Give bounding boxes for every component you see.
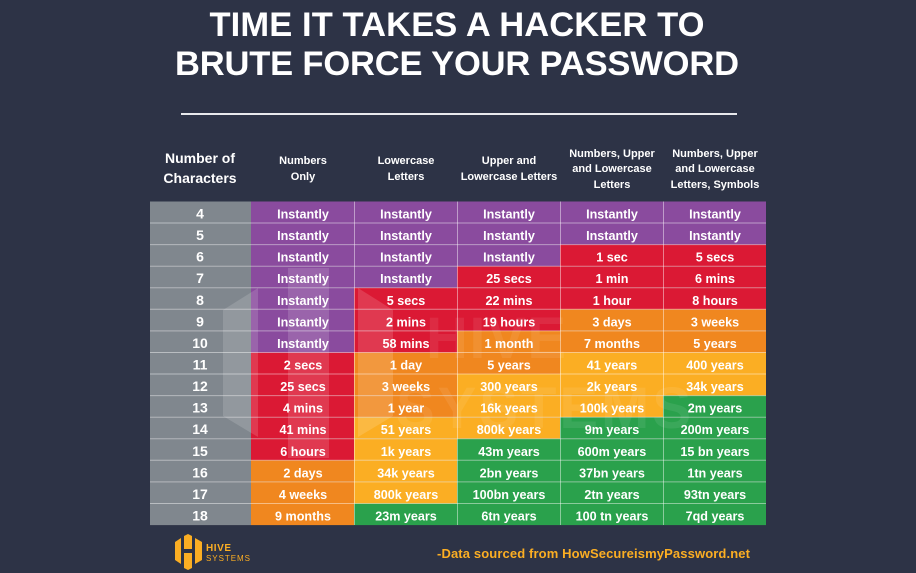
header: upper and lowercase letters: Lowercase Letters [461, 171, 557, 183]
row 12 characters: 25 secs [280, 380, 326, 394]
header: numbers only: Only [291, 171, 316, 183]
row 15 characters: 15 bn years [680, 445, 750, 459]
row 18 characters [150, 504, 766, 525]
row 18 characters: 7qd years [686, 510, 744, 524]
row 6 characters: Instantly [483, 251, 535, 265]
row 8 characters: 5 secs [387, 294, 425, 308]
row 12 characters [150, 374, 766, 396]
row 10 characters [150, 331, 766, 352]
row 6 characters: 6 [196, 249, 204, 265]
row 13 characters [150, 396, 766, 417]
row 8 characters [150, 288, 766, 309]
row 9 characters: Instantly [277, 315, 329, 329]
row 11 characters: 2 secs [284, 358, 322, 372]
header: upper and lowercase letters [461, 155, 557, 183]
row 10 characters: 10 [192, 335, 208, 351]
row 17 characters: 17 [192, 486, 208, 502]
row 8 characters: 1 hour [593, 294, 631, 308]
row 9 characters: 19 hours [483, 315, 535, 329]
row 13 characters: 13 [192, 400, 208, 416]
row 4 characters [150, 202, 766, 223]
header: lowercase letters: Letters [388, 171, 424, 183]
row 9 characters: 3 days [592, 315, 632, 329]
row 8 characters: 22 mins [486, 294, 532, 308]
title [175, 6, 739, 83]
row 9 characters: 9 [196, 313, 204, 329]
row 7 characters: 6 mins [695, 272, 735, 286]
row 13 characters: 16k years [480, 402, 538, 416]
row 10 characters: 58 mins [383, 337, 429, 351]
row 7 characters: 1 min [596, 272, 628, 286]
row 17 characters: 2tn years [584, 488, 640, 502]
row 4 characters: Instantly [689, 208, 741, 222]
row 9 characters: 2 mins [386, 315, 426, 329]
watermark: hive systems logo [223, 268, 691, 458]
row 7 characters: 7 [196, 270, 204, 286]
header: numbers only [279, 155, 327, 183]
row 17 characters: 100bn years [473, 488, 545, 502]
header: numbers, upper and lowercase letters: Numbers, Upper [569, 148, 656, 160]
row 15 characters: 43m years [478, 445, 540, 459]
logo wordmark: SYSTEMS [206, 554, 250, 563]
row 7 characters [150, 266, 766, 288]
row 4 characters: Instantly [380, 208, 432, 222]
row 15 characters: 15 [192, 443, 208, 459]
row 8 characters: 8 [196, 292, 204, 308]
row 7 characters: 25 secs [486, 272, 532, 286]
row 12 characters: 2k years [587, 380, 637, 394]
row 11 characters: 11 [193, 356, 208, 372]
row 18 characters: 6tn years [481, 510, 537, 524]
row 12 characters: 300 years [480, 380, 538, 394]
title: TIME IT TAKES A HACKER TO [210, 6, 704, 44]
row 4 characters: 4 [196, 206, 204, 222]
header: numbers, upper and lowercase letters: and Lowercase [572, 163, 652, 175]
row 8 characters: 8 hours [692, 294, 738, 308]
header: lowercase letters [378, 155, 434, 183]
row 18 characters: 9 months [275, 510, 331, 524]
row 5 characters: Instantly [277, 229, 329, 243]
row 16 characters: 34k years [377, 466, 435, 480]
row 17 characters: 93tn years [684, 488, 746, 502]
row 14 characters: 800k years [477, 423, 541, 437]
row 6 characters: 5 secs [696, 251, 734, 265]
row 9 characters: 3 weeks [691, 315, 739, 329]
row 10 characters: 7 months [584, 337, 640, 351]
row 7 characters: Instantly [277, 272, 329, 286]
row 14 characters: 9m years [585, 423, 639, 437]
row 5 characters: Instantly [689, 229, 741, 243]
row 14 characters: 51 years [381, 423, 431, 437]
row 15 characters: 600m years [578, 445, 646, 459]
row 10 characters: 1 month [485, 337, 533, 351]
row 14 characters: 200m years [681, 423, 749, 437]
row 15 characters: 6 hours [280, 445, 326, 459]
header: numbers, upper and lowercase letters [569, 148, 656, 191]
header: numbers, upper and lowercase letters: Letters [594, 179, 630, 191]
row 9 characters [150, 309, 766, 331]
row 12 characters: 12 [192, 378, 208, 394]
row 11 characters: 5 years [487, 358, 531, 372]
row 6 characters: 1 sec [596, 251, 628, 265]
watermark: hive systems logo: SYSTEMS [396, 376, 691, 441]
header: numbers, upper and lowercase letters, symbols [671, 148, 759, 191]
row 16 characters: 1tn years [687, 466, 743, 480]
row 6 characters [150, 245, 766, 266]
header: lowercase letters: Lowercase [378, 155, 434, 167]
row 16 characters: 2 days [283, 466, 323, 480]
row 10 characters: 5 years [693, 337, 737, 351]
row 17 characters: 800k years [374, 488, 438, 502]
row 4 characters: Instantly [586, 208, 638, 222]
table header [163, 148, 759, 191]
header: numbers, upper and lowercase letters, symbols: Numbers, Upper [672, 148, 759, 160]
row 11 characters: 1 day [390, 358, 422, 372]
row 16 characters: 2bn years [480, 466, 538, 480]
row 11 characters: 400 years [686, 358, 744, 372]
row 18 characters: 100 tn years [576, 510, 648, 524]
row 5 characters: 5 [196, 227, 204, 243]
row 17 characters [150, 482, 766, 504]
row 15 characters: 1k years [381, 445, 431, 459]
header: number of characters: Number of [165, 150, 235, 166]
row 11 characters: 41 years [587, 358, 637, 372]
row 13 characters: 4 mins [283, 402, 323, 416]
row 12 characters: 34k years [686, 380, 744, 394]
logo: hive systems [175, 534, 250, 570]
row 6 characters: Instantly [277, 251, 329, 265]
row 5 characters [150, 223, 766, 245]
row 15 characters [150, 439, 766, 460]
row 5 characters: Instantly [483, 229, 535, 243]
header: numbers only: Numbers [279, 155, 327, 167]
row 5 characters: Instantly [586, 229, 638, 243]
row 8 characters: Instantly [277, 294, 329, 308]
row 13 characters: 100k years [580, 402, 644, 416]
row 7 characters: Instantly [380, 272, 432, 286]
header: numbers, upper and lowercase letters, symbols: and Lowercase [675, 163, 755, 175]
header: number of characters: Characters [163, 170, 237, 186]
header: numbers, upper and lowercase letters, symbols: Letters, Symbols [671, 179, 759, 191]
row 13 characters: 2m years [688, 402, 742, 416]
row 16 characters [150, 460, 766, 482]
row 10 characters: Instantly [277, 337, 329, 351]
row 12 characters: 3 weeks [382, 380, 430, 394]
watermark: hive systems logo: HIVE [426, 306, 566, 371]
row 16 characters: 16 [192, 464, 208, 480]
header: number of characters [163, 150, 237, 186]
row 13 characters: 1 year [388, 402, 424, 416]
row 18 characters: 23m years [375, 510, 437, 524]
row 4 characters: Instantly [483, 208, 535, 222]
logo wordmark: HIVE [206, 543, 231, 554]
row 6 characters: Instantly [380, 251, 432, 265]
source note: -Data sourced from HowSecureismyPassword.net [437, 546, 751, 561]
row 14 characters: 14 [192, 421, 208, 437]
icon: hive hexagon [175, 534, 202, 570]
row 16 characters: 37bn years [579, 466, 645, 480]
row 4 characters: Instantly [277, 208, 329, 222]
title: BRUTE FORCE YOUR PASSWORD [175, 45, 739, 83]
table: time to brute force [150, 202, 766, 525]
row 18 characters: 18 [192, 508, 208, 524]
logo wordmark [206, 543, 250, 563]
row 11 characters [150, 352, 766, 374]
row 14 characters: 41 mins [280, 423, 326, 437]
row 5 characters: Instantly [380, 229, 432, 243]
header: upper and lowercase letters: Upper and [482, 155, 536, 167]
row 14 characters [150, 417, 766, 439]
row 17 characters: 4 weeks [279, 488, 327, 502]
